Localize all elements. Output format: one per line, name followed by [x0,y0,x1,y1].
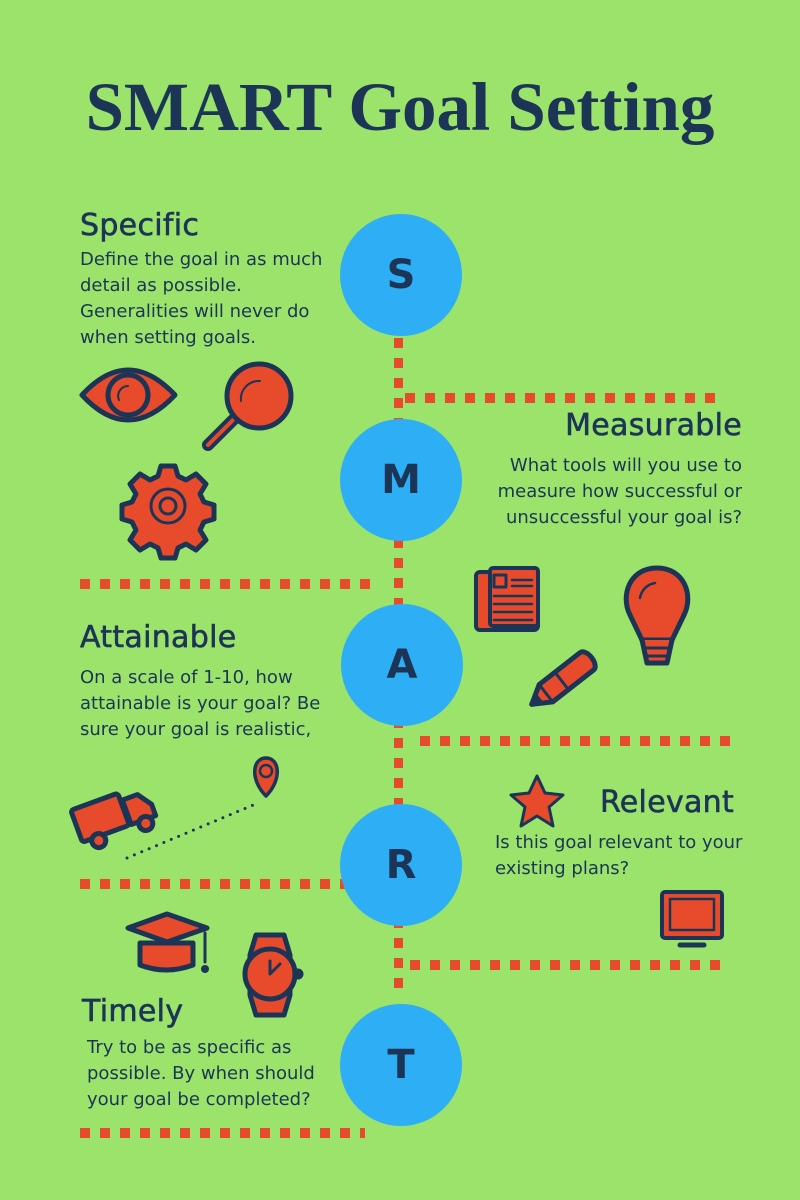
Timely text: possible. By when should [87,1063,315,1084]
circle R [340,804,462,926]
dashed line 3 [420,736,735,746]
Relevant text: Is this goal relevant to your [495,832,742,853]
Attainable text [80,620,320,740]
circle T [340,1004,462,1126]
Attainable text: Attainable [80,620,236,655]
icon: graduation cap [128,914,209,973]
vertical dotted line [394,338,403,998]
dashed line 5 [410,960,730,970]
icon: star [511,776,563,826]
icon: map pin [255,758,277,796]
Specific text: Specific [80,208,199,243]
Timely text: Try to be as specific as [87,1037,291,1058]
Specific text: when setting goals. [80,327,256,348]
Measurable text: Measurable [565,408,742,443]
dashed line 4 [80,879,355,889]
Specific text: detail as possible. [80,275,242,296]
dashed line 6 [80,1128,365,1138]
Relevant text: Relevant [600,785,734,820]
Attainable text: attainable is your goal? Be [80,693,320,714]
Measurable text [498,408,742,528]
Specific text: Define the goal in as much [80,249,322,270]
circle M [340,419,462,541]
circle A: A [387,642,417,688]
circle T: T [387,1042,415,1088]
icon: monitor [662,892,722,945]
Attainable text: On a scale of 1-10, how [80,667,293,688]
dashed line 1 [405,393,725,403]
Relevant text: existing plans? [495,858,629,879]
circle S: S [387,252,415,298]
icon: gear [122,466,214,558]
Timely text: Timely [82,994,183,1029]
circle M: M [381,457,421,503]
Timely text [82,994,315,1110]
Measurable text: What tools will you use to [510,455,742,476]
icon: watch [245,935,301,1015]
Attainable text: sure your goal is realistic, [80,719,311,740]
icon: pencil [525,649,598,713]
icon: lightbulb [626,568,688,663]
Measurable text: unsuccessful your goal is? [506,507,742,528]
dashed line 2 [80,579,380,589]
circle R: R [386,842,416,888]
Relevant text [495,785,742,879]
Specific text [80,208,322,348]
Measurable text: measure how successful or [498,481,742,502]
icon: truck [71,784,159,853]
Timely text: your goal be completed? [87,1089,311,1110]
icon: eye [82,370,175,420]
icon: magnifier [208,364,291,445]
icon: route dots [127,803,258,858]
icon: newspaper [476,568,538,630]
title: SMART Goal Setting [86,69,714,145]
circle A [341,604,463,726]
Specific text: Generalities will never do [80,301,309,322]
circle S [340,214,462,336]
